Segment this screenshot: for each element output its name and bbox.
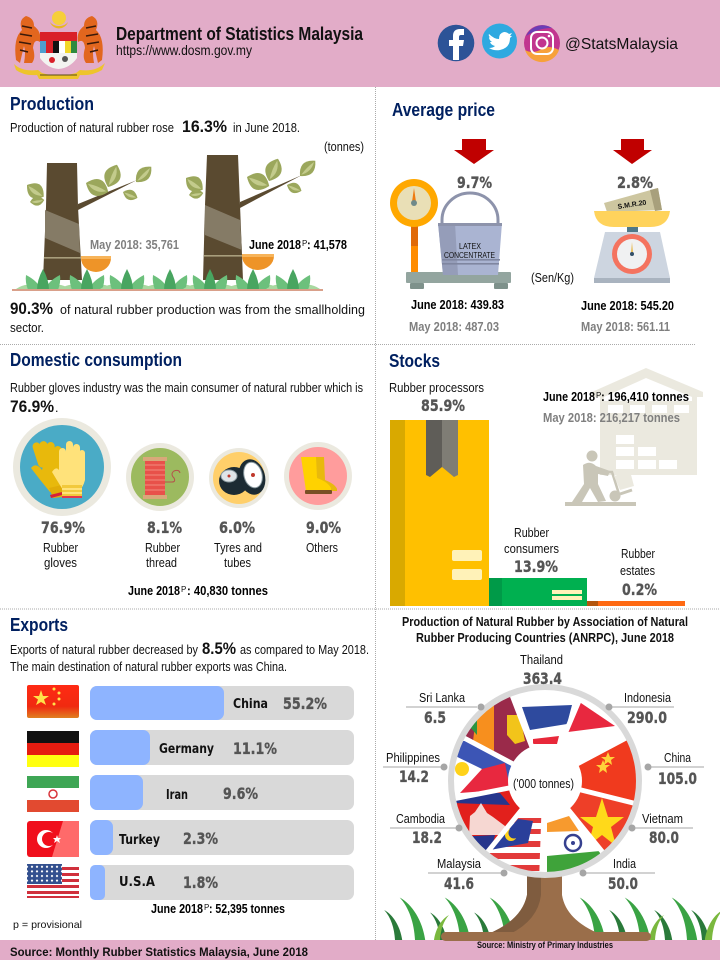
- label: China: [644, 751, 704, 788]
- icon: rubber gloves: [13, 418, 111, 516]
- stock totals: June 2018: [543, 390, 595, 404]
- label: Indonesia: [606, 691, 674, 727]
- consumption shares: 8.1%: [147, 518, 182, 537]
- bar: China: 55.2%: [283, 694, 327, 713]
- values: SMR20 prices: June 2018: 545.20: [581, 299, 674, 313]
- label: rubber consumers: Rubber: [514, 526, 549, 540]
- flag segment: Malaysia: [490, 818, 542, 871]
- flag segment: China: [578, 740, 636, 801]
- label: rubber estates: 0.2%: [622, 580, 657, 599]
- flag segment: Thailand: [522, 705, 572, 744]
- ANRPC heading: [402, 615, 688, 645]
- panel: production: [10, 94, 365, 335]
- consumption labels: Rubber: [145, 541, 180, 555]
- header band: [0, 0, 720, 87]
- label: Philippines: Philippines: [386, 751, 440, 765]
- consumption statement: .: [55, 401, 58, 415]
- flag segment: Philippines: [455, 741, 512, 793]
- bar: China: China: [233, 696, 268, 712]
- bar: USA: 1.8%: [183, 873, 218, 892]
- label: Thailand: Thailand: [520, 653, 563, 667]
- label: rubber estates: Rubber: [621, 547, 655, 561]
- consumption statement: [10, 381, 363, 416]
- label: Thailand: [520, 653, 563, 688]
- label: rubber consumers: 13.9%: [514, 557, 558, 576]
- flag: China: [27, 685, 79, 718]
- exports statement: as compared to May 2018.: [240, 643, 369, 657]
- label: Cambodia: Cambodia: [396, 812, 445, 826]
- consumption total: : 40,830 tonnes: [187, 584, 268, 598]
- flag: USA: [27, 863, 79, 898]
- bar: Turkey: Turkey: [119, 832, 160, 848]
- consumption shares: 76.9%: [41, 518, 85, 537]
- bar: Germany: Germany: [159, 741, 214, 757]
- label: Philippines: 14.2: [399, 767, 429, 786]
- production growth sentence: in June 2018.: [233, 121, 300, 135]
- exports statement: Exports of natural rubber decreased by: [10, 643, 199, 657]
- flag: Germany: [27, 731, 79, 767]
- exports total: P: [204, 903, 209, 912]
- bar: rubber estates book: [587, 601, 685, 606]
- flag segment: Vietnam: [570, 792, 633, 850]
- heading: production: Production: [10, 94, 94, 114]
- label: Malaysia: 41.6: [444, 874, 474, 893]
- flag segment: Sri Lanka: [466, 697, 530, 762]
- stock totals: [543, 390, 689, 425]
- label: rubber consumers: [504, 526, 559, 576]
- unit label: ('000 tonnes): [513, 777, 574, 791]
- consumption shares: 9.0%: [306, 518, 341, 537]
- icon: latex scale and bucket: LATEX: [459, 242, 482, 251]
- bar: USA: [90, 865, 354, 900]
- heading: exports: Exports: [10, 615, 68, 635]
- consumption statement: Rubber gloves industry was the main consumer of natural rubber which is: [10, 381, 363, 395]
- value: May production: May 2018: 35,761: [90, 238, 179, 252]
- consumption labels: thread: [146, 556, 177, 570]
- icon: Malaysian coat of arms: [14, 11, 105, 79]
- consumption total: [128, 584, 268, 598]
- label: rubber estates: estates: [620, 564, 655, 578]
- label: India: [580, 857, 655, 893]
- consumption shares: [41, 518, 341, 537]
- icon: tyres and tubes: [209, 448, 269, 508]
- bar: USA: U.S.A: [119, 874, 155, 890]
- consumption labels: Others: [306, 541, 338, 555]
- flag: Turkey: [27, 821, 79, 857]
- consumption labels: Tyres and: [214, 541, 262, 555]
- provisional note: p = provisional: [13, 919, 82, 931]
- smallholding statement: sector.: [10, 321, 44, 335]
- values: SMR20 prices: May 2018: 561.11: [581, 320, 670, 334]
- bar: Germany: 11.1%: [233, 739, 277, 758]
- label: Sri Lanka: Sri Lanka: [419, 691, 465, 705]
- smallholding statement: [10, 299, 365, 335]
- icon: latex scale and bucket: [390, 179, 511, 289]
- label: rubber processors: 85.9%: [421, 396, 465, 415]
- consumption shares: 6.0%: [219, 518, 255, 537]
- flag segment: Cambodia: [456, 790, 520, 850]
- label: Indonesia: 290.0: [627, 708, 667, 727]
- smallholding statement: 90.3%: [10, 299, 53, 318]
- consumption total: June 2018: [128, 584, 180, 598]
- stock totals: P: [596, 391, 601, 400]
- grass: [384, 898, 720, 940]
- consumption labels: Rubber: [43, 541, 78, 555]
- bar: Germany: [90, 730, 354, 765]
- smallholding statement: of natural rubber production was from the smallholding: [60, 303, 365, 317]
- label: Cambodia: [390, 812, 462, 847]
- label: Vietnam: [628, 812, 693, 847]
- bar: China: [90, 686, 354, 720]
- production growth sentence: Production of natural rubber rose: [10, 121, 174, 135]
- label: rubber estates: [620, 547, 657, 599]
- icon: SMR20 rubber block on scale: [594, 188, 670, 283]
- title: Department of Statistics Malaysia: [116, 24, 364, 44]
- icon: warehouse with worker: [565, 368, 703, 506]
- icon: SMR20 rubber block on scale: S.M.R.20: [617, 200, 647, 211]
- bar: Iran: 9.6%: [223, 784, 258, 803]
- exports total: June 2018: [151, 902, 203, 916]
- label: Vietnam: 80.0: [649, 828, 679, 847]
- icon: rubber thread spool: [126, 443, 194, 511]
- social handle: @StatsMalaysia: [565, 36, 678, 53]
- value: June production: P: [302, 239, 307, 248]
- label: Sri Lanka: 6.5: [424, 708, 446, 727]
- label: Malaysia: Malaysia: [437, 857, 481, 871]
- bar: Turkey: [90, 820, 354, 855]
- consumption total: P: [181, 585, 186, 594]
- production growth sentence: [10, 117, 300, 136]
- ANRPC heading: Rubber Producing Countries (ANRPC), June 2018: [416, 631, 674, 645]
- bar: rubber consumers book: [489, 578, 587, 606]
- bar: Iran: Iran: [166, 787, 188, 803]
- label: Philippines: [383, 751, 448, 786]
- unit label: (Sen/Kg): [531, 271, 574, 285]
- label: rubber processors: [389, 381, 484, 415]
- label: Indonesia: Indonesia: [624, 691, 671, 705]
- panel: stocks: [389, 351, 703, 606]
- source: ministry: Source: Ministry of Primary Industries: [477, 940, 613, 950]
- flag segment: Indonesia: [568, 703, 615, 732]
- values: SMR20 prices: [581, 299, 674, 334]
- value: June production: : 41,578: [307, 238, 347, 252]
- arrow: latex price down: [454, 139, 494, 164]
- panel: average price: [390, 100, 674, 334]
- consumption labels: gloves: [44, 556, 77, 570]
- stock totals: : 196,410 tonnes: [601, 390, 689, 404]
- stock totals: May 2018: 216,217 tonnes: [543, 411, 680, 425]
- icon: facebook: [438, 25, 474, 61]
- exports total: : 52,395 tonnes: [209, 902, 285, 916]
- website url: https://www.dosm.gov.my: [116, 42, 252, 58]
- values: latex concentrate prices: June 2018: 439.83: [411, 298, 504, 312]
- arrow: SMR20 price down: [613, 139, 652, 164]
- label: rubber consumers: consumers: [504, 542, 559, 556]
- consumption labels: tubes: [224, 556, 251, 570]
- bar: rubber processors book: [390, 420, 489, 606]
- unit label: (tonnes): [324, 140, 364, 154]
- production growth sentence: 16.3%: [182, 117, 227, 136]
- values: latex concentrate prices: [409, 298, 504, 334]
- label: Sri Lanka: [406, 691, 484, 727]
- values: latex concentrate prices: May 2018: 487.03: [409, 320, 499, 334]
- heading: domestic consumption: Domestic consumption: [10, 350, 182, 370]
- exports statement: 8.5%: [202, 639, 236, 658]
- label: China: 105.0: [658, 769, 697, 788]
- label: Thailand: 363.4: [523, 669, 562, 688]
- label: China: China: [664, 751, 691, 765]
- label: Malaysia: [428, 857, 508, 893]
- footer band: [0, 940, 720, 960]
- label: Cambodia: 18.2: [412, 828, 442, 847]
- bar: Iran: [90, 775, 354, 810]
- value: SMR20 change: 2.8%: [617, 173, 653, 192]
- exports total: [151, 902, 285, 916]
- grass strip: [12, 269, 323, 291]
- value: June production: June 2018: [249, 238, 301, 252]
- flag: Iran: [27, 776, 79, 812]
- heading: stocks: Stocks: [389, 351, 440, 371]
- consumption labels: [43, 541, 338, 570]
- icon: latex scale and bucket: CONCENTRATE: [444, 251, 495, 260]
- icon: rubber tree May: [23, 162, 156, 280]
- icon: twitter: [482, 24, 517, 58]
- icon: rubber boots: [284, 442, 352, 510]
- value: June production: [249, 238, 347, 252]
- bar: Turkey: 2.3%: [183, 829, 218, 848]
- exports statement: [10, 639, 369, 674]
- wheel of flags: [448, 684, 642, 878]
- flag segment: India: [547, 816, 600, 872]
- heading: average price: Average price: [392, 100, 495, 120]
- label: Vietnam: Vietnam: [642, 812, 683, 826]
- label: India: 50.0: [608, 874, 638, 893]
- panel: domestic consumption: [10, 350, 363, 598]
- source: Source: Monthly Rubber Statistics Malaysia, June 2018: [10, 945, 308, 959]
- label: rubber processors: Rubber processors: [389, 381, 484, 395]
- exports statement: The main destination of natural rubber exports was China.: [10, 660, 287, 674]
- panel: exports: [10, 615, 369, 959]
- label: India: India: [613, 857, 636, 871]
- tree trunk stand: [441, 872, 651, 941]
- panel: ANRPC production: [383, 615, 720, 950]
- icon: instagram: [524, 25, 560, 62]
- icon: rubber tree June: [182, 155, 320, 280]
- value: latex change: 9.7%: [457, 173, 492, 192]
- consumption statement: 76.9%: [10, 397, 54, 416]
